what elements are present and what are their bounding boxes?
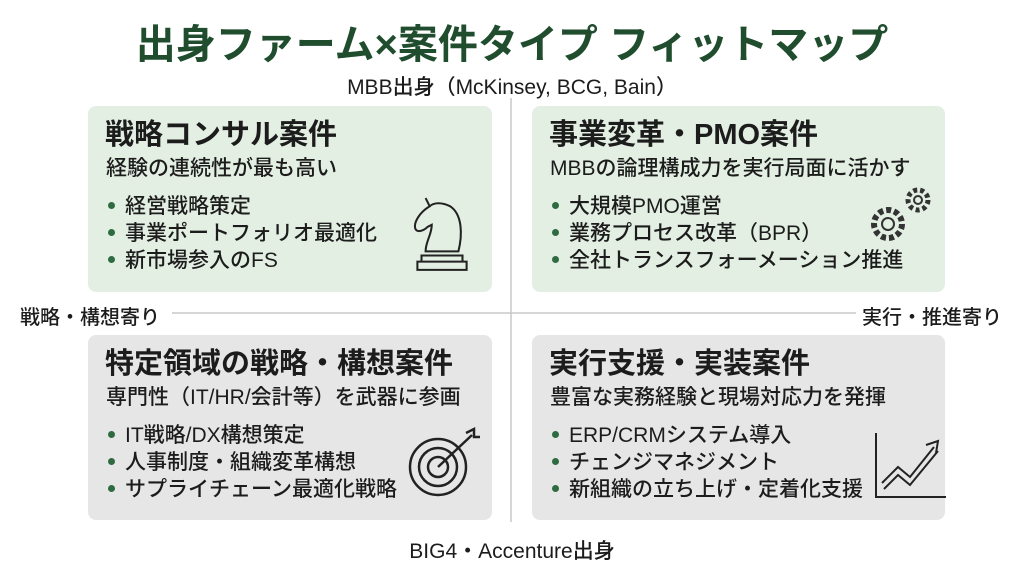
subtitle: MBBの論理構成力を実行局面に活かす xyxy=(550,157,911,180)
bullets: チェンジマネジメント xyxy=(569,451,779,474)
axis label: right: 実行・推進寄り xyxy=(862,307,1002,329)
axis label: left: 戦略・構想寄り xyxy=(20,307,160,329)
title: 出身ファーム×案件タイプ フィットマップ xyxy=(136,23,888,67)
bullets: 事業ポートフォリオ最適化 xyxy=(125,222,377,245)
bullets xyxy=(552,424,863,501)
heading: 事業変革・PMO案件 xyxy=(549,119,818,151)
panel: strategy consulting xyxy=(88,106,492,292)
subtitle: 経験の連続性が最も高い xyxy=(106,157,337,180)
icon: target xyxy=(408,427,480,496)
axis label: top: MBB出身（McKinsey, BCG, Bain） xyxy=(347,76,677,99)
bullets: 新組織の立ち上げ・定着化支援 xyxy=(569,478,863,501)
heading: 実行支援・実装案件 xyxy=(549,348,810,380)
panel: transformation PMO xyxy=(532,106,945,292)
bullets: 大規模PMO運営 xyxy=(569,195,722,218)
icon: chess knight xyxy=(414,198,468,271)
bullets: 新市場参入のFS xyxy=(125,249,278,272)
bullets xyxy=(552,195,903,272)
heading: 戦略コンサル案件 xyxy=(105,119,337,151)
bullets: 人事制度・組織変革構想 xyxy=(125,451,356,474)
bullets xyxy=(108,194,377,272)
heading: 特定領域の戦略・構想案件 xyxy=(105,348,453,380)
bullets: 経営戦略策定 xyxy=(125,195,251,218)
bullets: ERP/CRMシステム導入 xyxy=(569,424,791,447)
bullets xyxy=(108,424,397,501)
bullets: 全社トランスフォーメーション推進 xyxy=(569,249,903,272)
axis label: bottom: BIG4・Accenture出身 xyxy=(409,540,615,563)
panel: domain strategy xyxy=(88,335,492,520)
icon: growth chart xyxy=(875,433,946,498)
panel: implementation xyxy=(532,335,945,520)
subtitle: 専門性（IT/HR/会計等）を武器に参画 xyxy=(106,386,461,409)
bullets: IT戦略/DX構想策定 xyxy=(125,424,305,447)
bullets: 業務プロセス改革（BPR） xyxy=(569,222,822,245)
icon: gears xyxy=(871,188,930,241)
bullets: サプライチェーン最適化戦略 xyxy=(125,478,397,501)
subtitle: 豊富な実務経験と現場対応力を発揮 xyxy=(550,386,886,409)
